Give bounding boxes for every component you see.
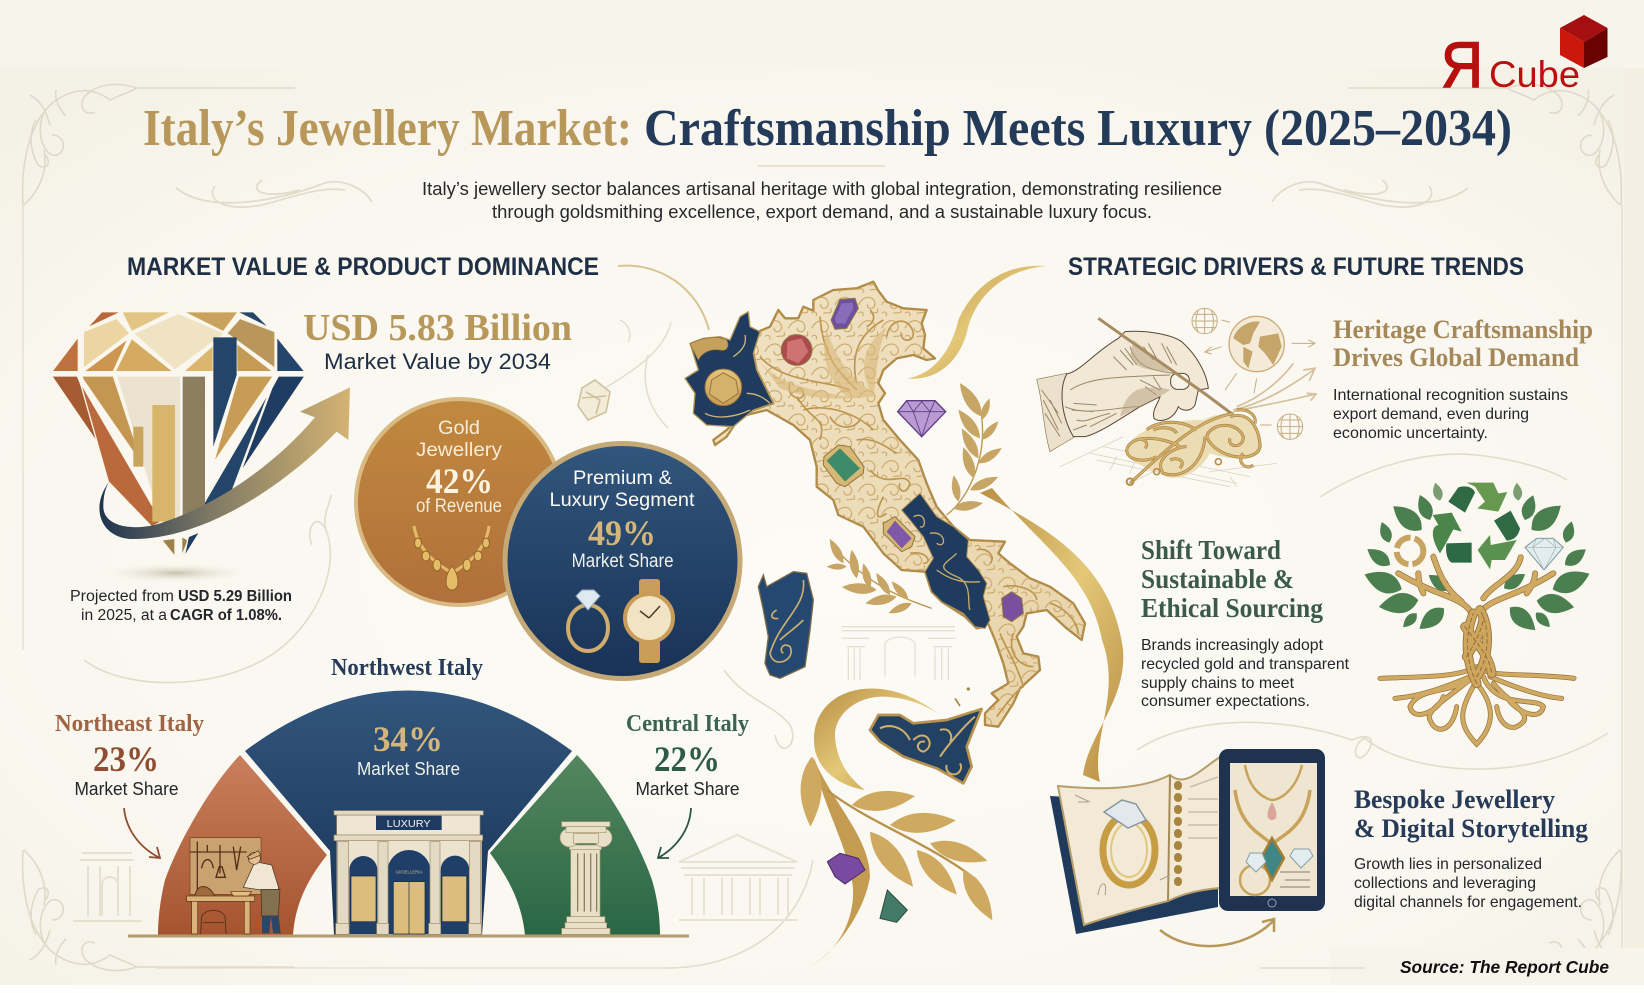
gold ring of arrows: [1397, 538, 1423, 564]
label: northwest italy: Northwest Italy: [331, 655, 483, 681]
text: heritage craftsmanship: Drives Global Demand: [1333, 343, 1580, 372]
label: northeast italy: Market Share: [74, 779, 178, 799]
faint temple: [679, 835, 797, 920]
text: bespoke jewellery: [1354, 785, 1588, 911]
chart bars: [133, 337, 237, 522]
diamond shadow: [100, 563, 252, 583]
flourishes beside subtitle: [176, 180, 1468, 207]
panel: premium and luxury segment circle: Luxury Segment: [550, 490, 695, 511]
illustration: ornate map of italy: [685, 266, 1085, 727]
tablet: [1219, 749, 1325, 911]
text: sustainable sourcing: supply chains to meet: [1141, 675, 1295, 692]
connector flourishes: [84, 266, 1608, 968]
label: northwest italy: [331, 655, 483, 779]
text: heritage craftsmanship: International recognition sustains: [1333, 387, 1568, 404]
projection note: USD 5.29 Billion: [178, 588, 292, 605]
panel: gold jewellery circle: [356, 399, 562, 605]
logo: RCube: Я: [1441, 28, 1483, 101]
ribbon and olive branch: lower: [800, 688, 1000, 968]
segment: northeast: [158, 755, 327, 935]
laurel branches: [826, 380, 1004, 617]
illustration: sicily: [870, 687, 982, 783]
text: bespoke jewellery: Bespoke Jewellery: [1354, 785, 1555, 814]
segment: northwest: [245, 690, 572, 935]
logo: RCube: [1441, 15, 1608, 101]
projection note: [70, 588, 292, 624]
text: heritage craftsmanship: Heritage Craftsmanship: [1333, 315, 1593, 344]
text: bespoke jewellery: Growth lies in personalized: [1354, 856, 1542, 873]
arrow: central: [658, 808, 691, 858]
label: northeast italy: 23%: [93, 739, 159, 779]
text: bespoke jewellery: collections and leveraging: [1354, 875, 1536, 892]
ribbon: upper: [907, 266, 1047, 379]
illustration: sardinia: [758, 572, 813, 678]
projection note: Projected from: [70, 588, 174, 605]
text: sustainable sourcing: Brands increasingly adopt: [1141, 637, 1324, 654]
source note: Source: The Report Cube: [1400, 957, 1609, 977]
panel: premium and luxury segment circle: [505, 444, 740, 678]
text: bespoke jewellery: digital channels for engagement.: [1354, 894, 1582, 911]
panel: premium and luxury segment circle: Premium &: [573, 468, 672, 489]
globes and arrows: [1192, 308, 1316, 439]
icon: luxury storefront: [334, 811, 483, 934]
growth arrow swoosh: [99, 387, 350, 539]
diamond pavilion facets: [52, 376, 305, 557]
label: central italy: [626, 711, 749, 799]
text: heritage craftsmanship: export demand, even during: [1333, 406, 1529, 423]
text: sustainable sourcing: Shift Toward: [1141, 535, 1281, 565]
ribbon: right side: [980, 488, 1123, 782]
projection note: CAGR of 1.08%.: [170, 607, 282, 624]
diamond crown facets: [52, 312, 305, 372]
text: sustainable sourcing: Ethical Sourcing: [1141, 593, 1323, 623]
icon: floating purple diamond: [898, 401, 946, 437]
text: sustainable sourcing: recycled gold and transparent: [1141, 656, 1350, 673]
subtitle: through goldsmithing excellence, export demand, and a sustainable luxury focus.: [492, 202, 1152, 222]
market value callout: USD 5.83 Billion: [303, 307, 572, 349]
text: heritage craftsmanship: economic uncertainty.: [1333, 425, 1488, 442]
trunk and roots: [1380, 557, 1574, 744]
navy central apennines: [902, 493, 990, 628]
panel: gold jewellery circle: Jewellery: [416, 440, 503, 461]
necklaces on screen: [1235, 765, 1310, 895]
title: [143, 100, 1512, 157]
text: sustainable sourcing: [1141, 535, 1350, 710]
hand: [1037, 318, 1233, 452]
arrow: northeast: [124, 808, 160, 858]
text: sustainable sourcing: consumer expectations.: [1141, 693, 1310, 710]
panel: gold jewellery circle: 42%: [426, 461, 493, 501]
title underline: [758, 165, 885, 167]
heading: strategic drivers and future trends: STRATEGIC DRIVERS & FUTURE TRENDS: [1068, 253, 1524, 281]
panel: premium and luxury segment circle: 49%: [588, 513, 656, 553]
icon: diamond bar chart with growth arrow: [52, 312, 350, 557]
icon: diamond ring: [568, 590, 608, 651]
paper grid: [1060, 437, 1277, 487]
illustration: sketchbook and tablet: [1050, 749, 1325, 946]
icon: gold watch: [625, 579, 673, 663]
projection note: in 2025, at a: [81, 607, 167, 624]
mainland silhouette: [713, 282, 1085, 727]
recycling symbol: [1433, 483, 1520, 569]
navy northwest region: [685, 312, 773, 427]
loose gemstones: [827, 853, 907, 922]
market value callout: Market Value by 2034: [324, 349, 551, 374]
icon: gold necklace: [414, 526, 490, 590]
panel: gold jewellery circle: Gold: [438, 418, 480, 439]
label: central italy: 22%: [654, 739, 720, 779]
icon: goldsmith workshop: [187, 838, 281, 934]
illustration: recycling tree: [1361, 481, 1593, 744]
label: northwest italy: Market Share: [357, 759, 460, 779]
curved arrow: [1160, 919, 1274, 946]
small diamond: [1525, 538, 1563, 570]
text: bespoke jewellery: & Digital Storytelling: [1354, 814, 1588, 843]
leaves: [1361, 481, 1593, 636]
panel: gold jewellery circle: of Revenue: [416, 496, 502, 517]
label: northeast italy: [55, 711, 204, 799]
icon: necklace pendant sketch: [578, 380, 610, 420]
faint colonnade: [842, 627, 956, 680]
illustration: craftsman hand with filigree and globes: [1037, 308, 1316, 487]
filigree: [760, 310, 1078, 717]
panel: premium and luxury segment circle: Market Share: [572, 551, 674, 572]
market value callout: [303, 307, 572, 374]
label: northeast italy: Northeast Italy: [55, 711, 204, 737]
gemstones on map: [781, 298, 1023, 622]
icon: ionic column: [560, 822, 612, 934]
subtitle: Italy’s jewellery sector balances artisanal heritage with global integration, demonstrating resilience: [422, 179, 1222, 199]
chart: regional market share dome: [128, 690, 689, 936]
text: sustainable sourcing: Sustainable &: [1141, 564, 1294, 594]
logo: RCube: Cube: [1489, 54, 1580, 95]
sardinia filigree: [770, 580, 804, 662]
diamond ring drawing: [1103, 800, 1155, 885]
title: Craftsmanship Meets Luxury (2025–2034): [644, 100, 1512, 157]
label: northwest italy: 34%: [373, 719, 443, 759]
faint arch: [73, 853, 142, 921]
sketchbook: [1050, 757, 1220, 934]
icon: luxury storefront: LUXURY: [387, 819, 431, 830]
icon: red cube: [1560, 15, 1608, 68]
label: central italy: Central Italy: [626, 711, 749, 737]
text: heritage craftsmanship: [1333, 315, 1593, 442]
subtitle: [422, 179, 1222, 222]
title: Italy’s Jewellery Market:: [143, 100, 632, 157]
heading: market value and product dominance: MARKET VALUE & PRODUCT DOMINANCE: [127, 253, 599, 281]
label: central italy: Market Share: [636, 779, 740, 799]
segment: central: [490, 755, 660, 935]
icon: luxury storefront: GIOIELLERIA: [396, 869, 422, 874]
ground line: [128, 934, 689, 938]
filigree brooch: [1126, 410, 1262, 485]
